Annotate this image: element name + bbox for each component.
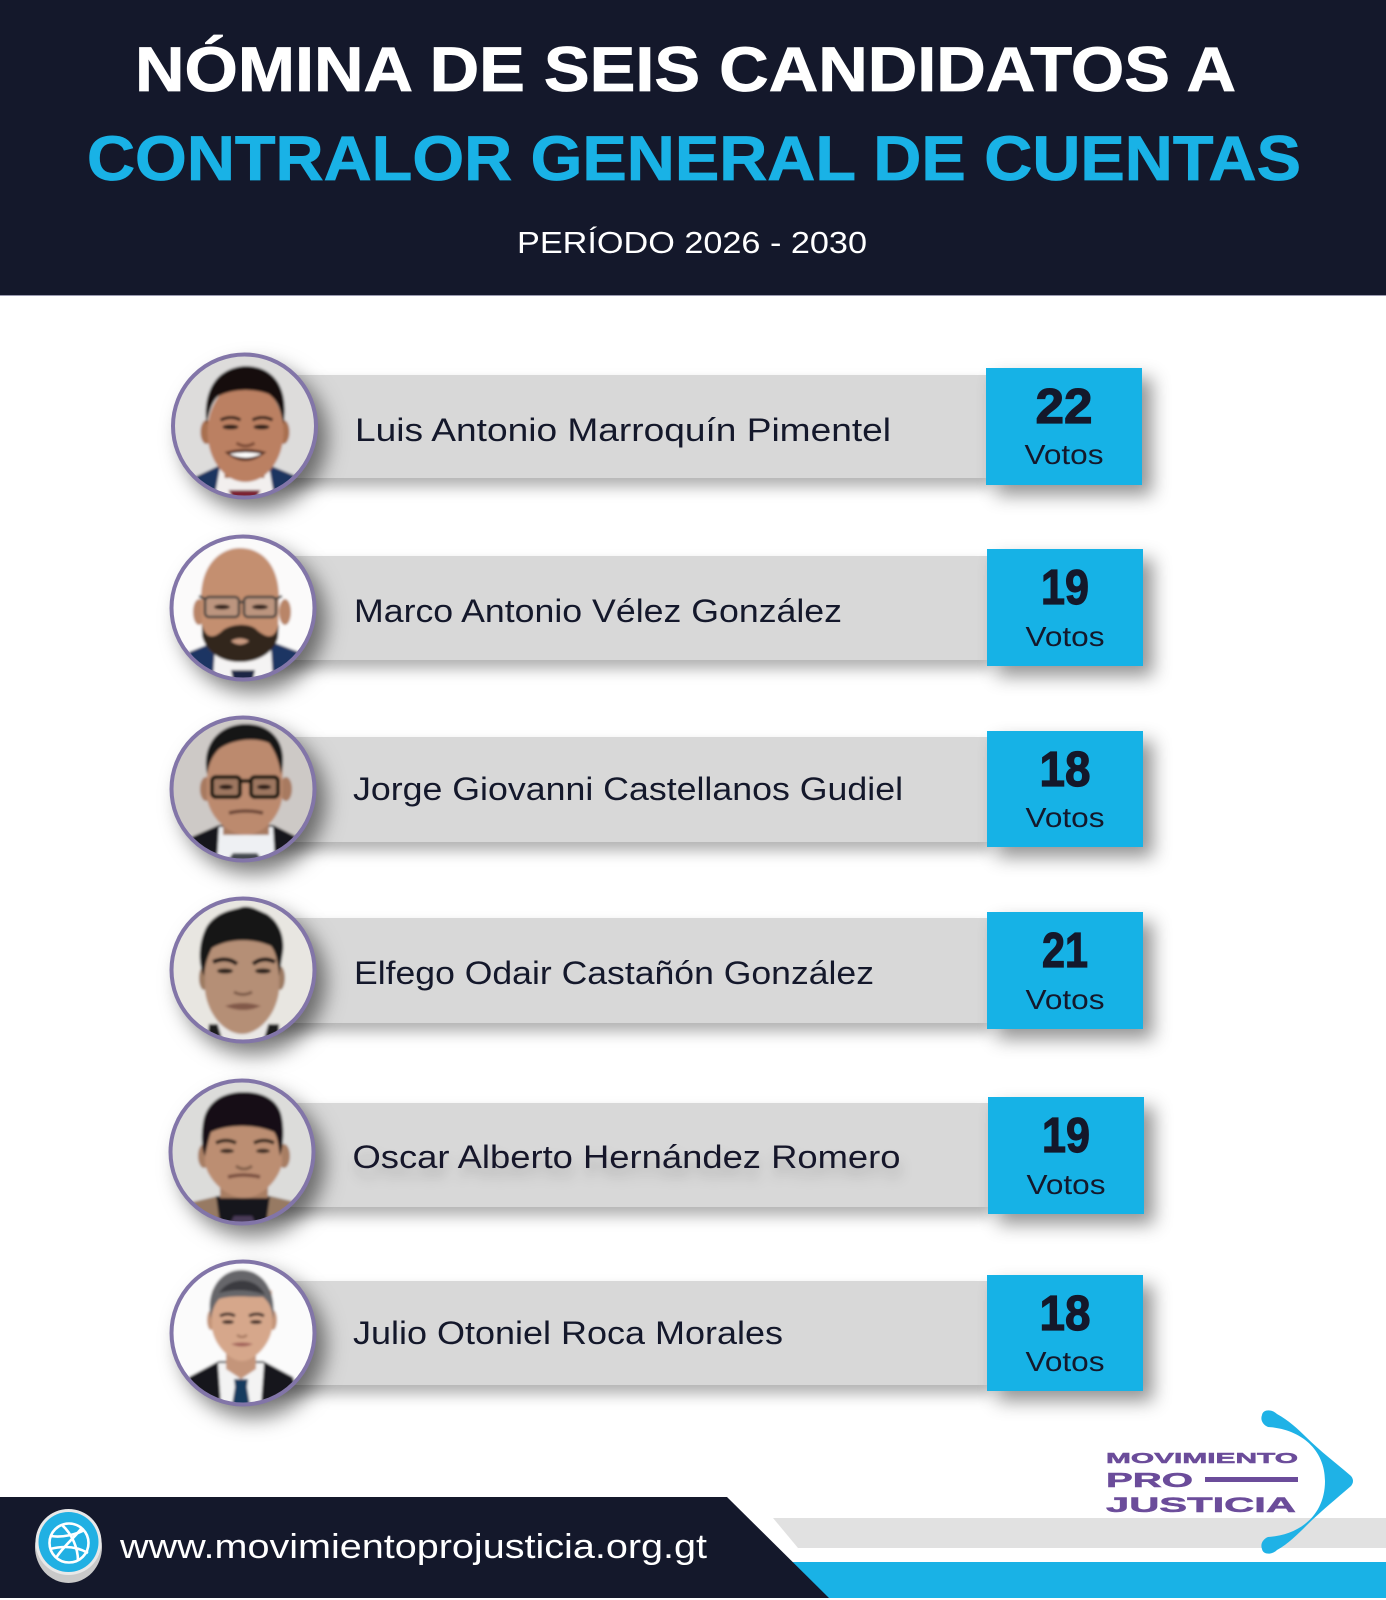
logo word JUSTICIA: JUSTICIA [1106, 1494, 1296, 1517]
vote box 4: 21 [1042, 924, 1088, 978]
vote box 5: Votos [1026, 1169, 1106, 1200]
vote box 2: Votos [1026, 621, 1104, 652]
vote box 1: 22 [1036, 380, 1092, 434]
candidate row 2 [170, 535, 1143, 681]
logo word MOVIMIENTO: MOVIMIENTO [1106, 1450, 1299, 1467]
title line 1: NÓMINA DE SEIS CANDIDATOS A [135, 35, 1236, 105]
name bar 2 [244, 556, 989, 660]
portrait 5 [169, 1079, 315, 1225]
name bar 6 [244, 1281, 989, 1385]
vote box 2: 19 [1041, 561, 1089, 615]
header band [0, 0, 1386, 296]
candidate name 3: Jorge Giovanni Castellanos Gudiel [353, 771, 903, 807]
name bar 4 [244, 918, 989, 1023]
vote box 3: 18 [1040, 743, 1090, 797]
portrait 3 [170, 716, 316, 862]
name bar 3 [244, 737, 989, 842]
vote box 4 [987, 912, 1143, 1029]
period subtitle: PERÍODO 2026 - 2030 [517, 225, 867, 260]
vote box 1: Votos [1024, 439, 1104, 470]
vote box 5: 19 [1042, 1109, 1090, 1163]
candidate row 1 [172, 353, 1142, 499]
name bar 1 [244, 375, 989, 478]
portrait 6 [170, 1260, 316, 1406]
candidate row 4 [170, 897, 1143, 1043]
title line 2: CONTRALOR GENERAL DE CUENTAS [87, 124, 1301, 194]
candidate name 2: Marco Antonio Vélez González [354, 593, 842, 629]
candidate name 6: Julio Otoniel Roca Morales [353, 1315, 783, 1351]
website url: www.movimientoprojusticia.org.gt [119, 1528, 708, 1566]
vote box 3: Votos [1026, 802, 1104, 833]
portrait 1 [172, 353, 318, 499]
portrait 4 [170, 897, 316, 1043]
vote box 6: Votos [1026, 1346, 1104, 1377]
candidate row 5 [169, 1079, 1144, 1225]
vote box 5 [988, 1097, 1144, 1214]
logo: Movimiento Pro Justicia [1106, 1410, 1353, 1554]
icon: web globe button [35, 1509, 102, 1583]
candidate row 3 [170, 716, 1143, 862]
portrait 2 [170, 535, 316, 681]
candidate row 6 [170, 1260, 1143, 1406]
vote box 2 [987, 549, 1143, 666]
vote box 6: 18 [1040, 1287, 1090, 1341]
icon: logo arrow [1261, 1410, 1353, 1554]
vote box 6 [987, 1275, 1143, 1391]
footer accent bands [773, 1518, 1386, 1598]
name bar 5 [244, 1103, 989, 1207]
vote box 1 [986, 368, 1142, 485]
candidate name 4: Elfego Odair Castañón González [354, 955, 874, 991]
logo word PRO: PRO [1106, 1470, 1193, 1492]
candidate name 5: Oscar Alberto Hernández Romero [352, 1139, 900, 1175]
vote box 3 [987, 731, 1143, 847]
vote box 4: Votos [1026, 984, 1104, 1015]
candidate name 1: Luis Antonio Marroquín Pimentel [355, 412, 891, 448]
footer panel with website [0, 1497, 829, 1598]
